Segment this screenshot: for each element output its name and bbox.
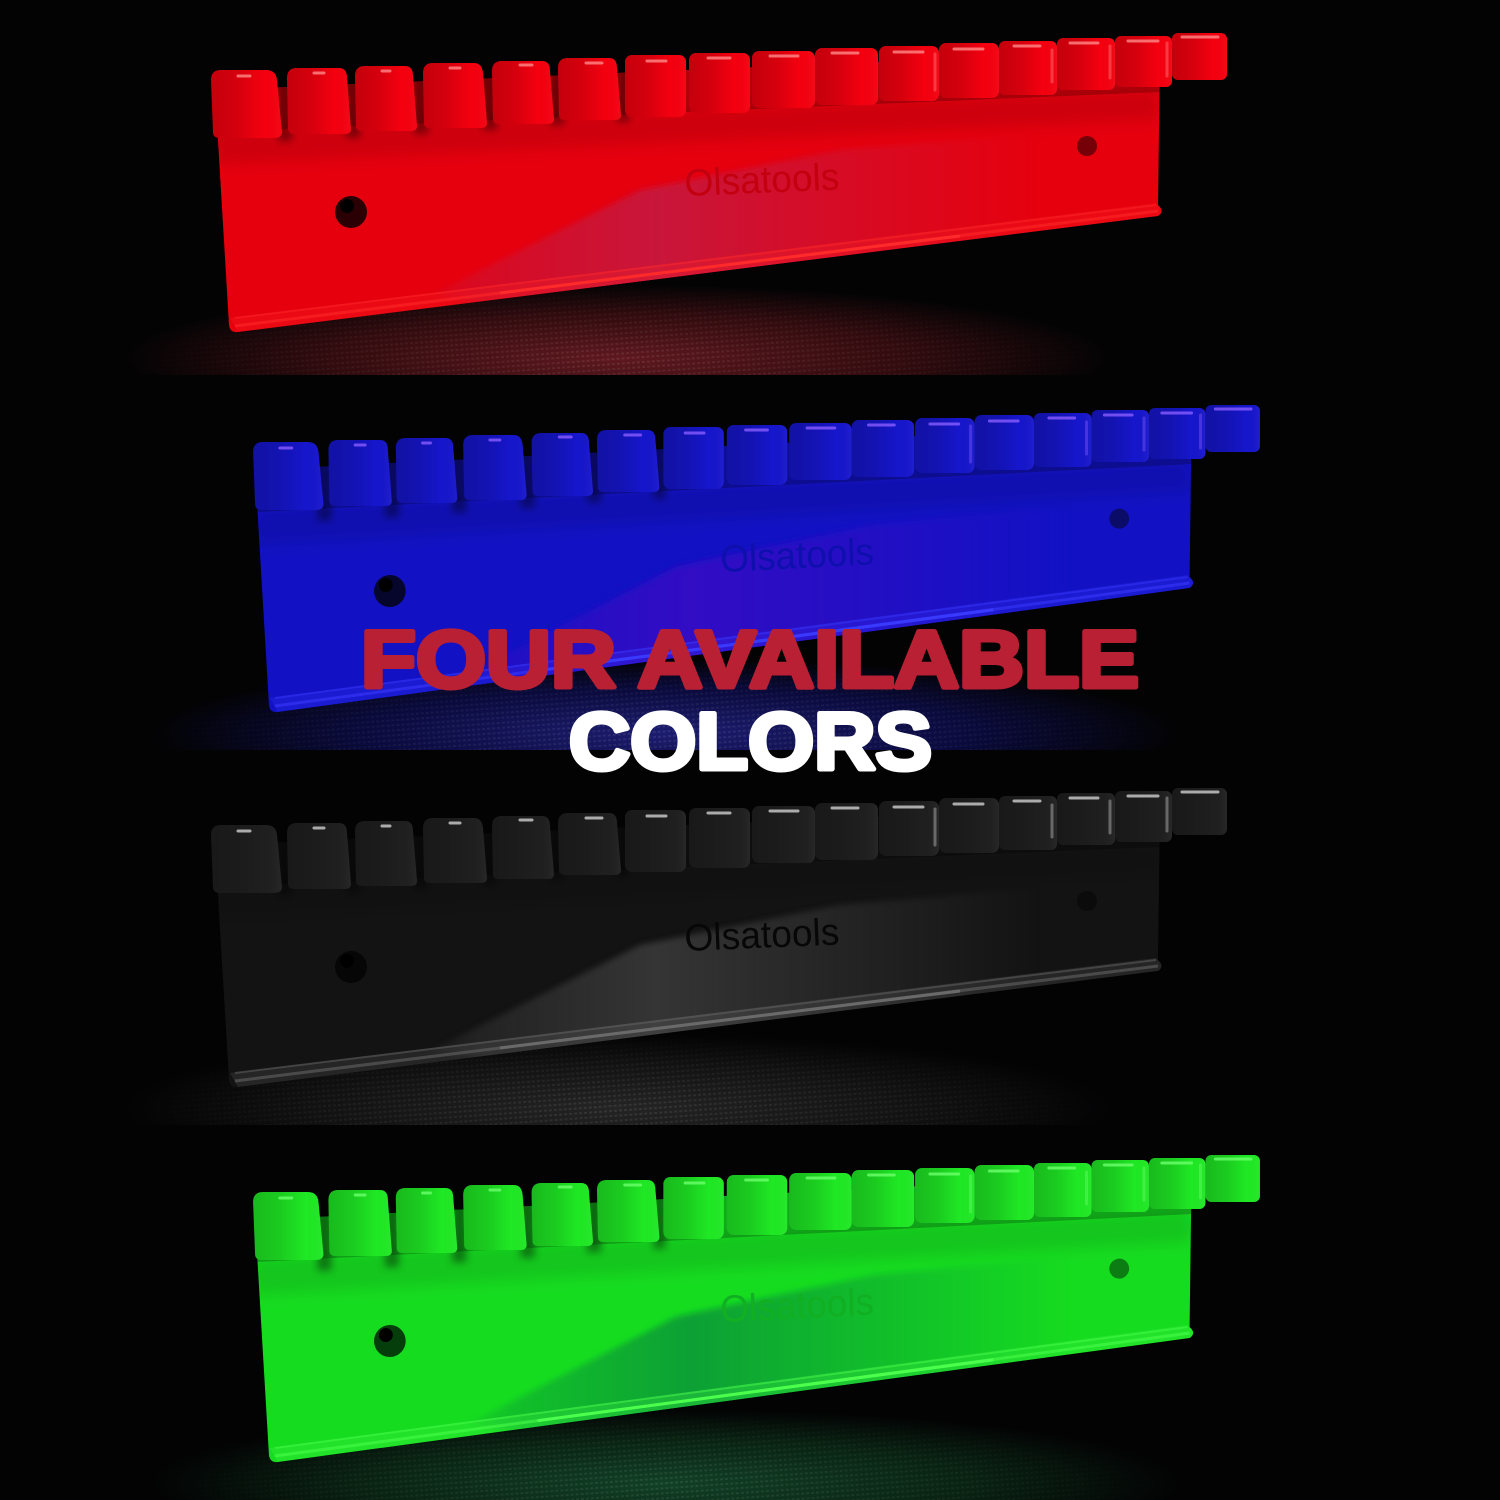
- heading line one: FOUR AVAILABLE: [361, 615, 1139, 705]
- blue socket rail: Olsatools: [719, 531, 875, 581]
- panel: blue rail: [130, 405, 1270, 750]
- blue socket rail: [253, 405, 1260, 712]
- heading line two: COLORS: [569, 697, 932, 787]
- black socket rail: [211, 788, 1227, 1087]
- floor glow: grey: [188, 1044, 1043, 1125]
- black socket rail: Olsatools: [684, 912, 840, 960]
- floor glow: blue: [182, 664, 1151, 750]
- panel: red rail: [100, 33, 1227, 375]
- panel: green rail: [130, 1155, 1270, 1500]
- title: four available colors: [361, 615, 1139, 787]
- red socket rail: [211, 33, 1227, 332]
- green socket rail: [253, 1155, 1260, 1462]
- floor glow: green: [200, 1416, 1132, 1500]
- panel: black rail: [100, 788, 1227, 1125]
- embossed logo: Olsatools: [684, 157, 840, 205]
- floor glow: red: [156, 289, 1080, 375]
- green socket rail: Olsatools: [719, 1281, 875, 1331]
